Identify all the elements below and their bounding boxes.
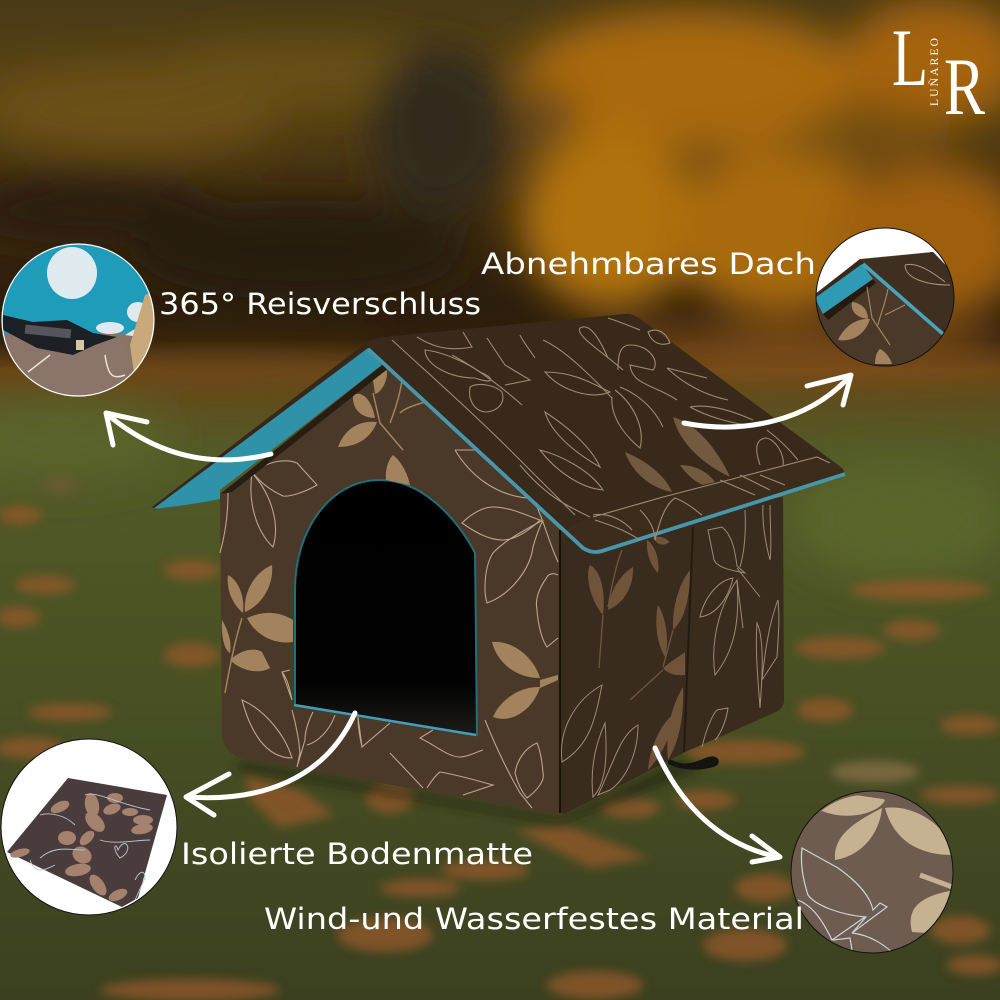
door threshold trim: [294, 705, 476, 735]
roof lower flap: [565, 456, 844, 552]
side wall fold: [684, 527, 693, 752]
front wall outline leaves: [220, 450, 558, 808]
roof tan leaves: [625, 417, 730, 492]
logo: LR monogram: [892, 12, 985, 132]
label: floor mat: Isolierte Bodenmatte: [181, 837, 533, 871]
roof outline leaves: [392, 318, 830, 540]
logo: LR monogram: LUÑAREO: [927, 38, 941, 106]
label: removable roof: Abnehmbares Dach: [481, 247, 816, 281]
ground shadow: [235, 760, 700, 825]
callout: 365° zipper photo: [0, 244, 160, 400]
callout: floor mat photo: [1, 739, 177, 915]
arrow: to material: [655, 748, 780, 862]
side wall outline leaves: [561, 505, 779, 797]
callout: material close-up photo: [791, 790, 955, 955]
dog house: [152, 314, 845, 825]
corner seam: [559, 530, 561, 813]
door opening: [295, 480, 477, 735]
tab under house: [668, 756, 719, 770]
eave shadow: [220, 365, 390, 494]
logo: LR monogram: R: [944, 41, 985, 132]
front wall: [220, 366, 560, 815]
callout: removable roof photo: [815, 228, 960, 370]
side wall stems: [599, 550, 673, 700]
front wall tan leaves: [222, 370, 558, 719]
arrow: to floor mat: [186, 713, 355, 815]
roof left blue underside: [153, 348, 382, 509]
label: material: Wind-und Wasserfestes Material: [264, 902, 804, 936]
front wall stems: [225, 380, 425, 693]
side wall tan leaves: [588, 537, 690, 770]
label: zipper: 365° Reisverschluss: [159, 287, 481, 321]
arrow: to zipper: [106, 413, 271, 460]
arrow: to roof: [684, 375, 851, 427]
roof right panel: [367, 314, 844, 552]
logo: LR monogram: L: [892, 12, 928, 103]
roof blue piping: [368, 349, 845, 552]
right side wall: [560, 497, 784, 814]
floor mat: [7, 778, 167, 907]
roof left rim: [152, 342, 372, 510]
